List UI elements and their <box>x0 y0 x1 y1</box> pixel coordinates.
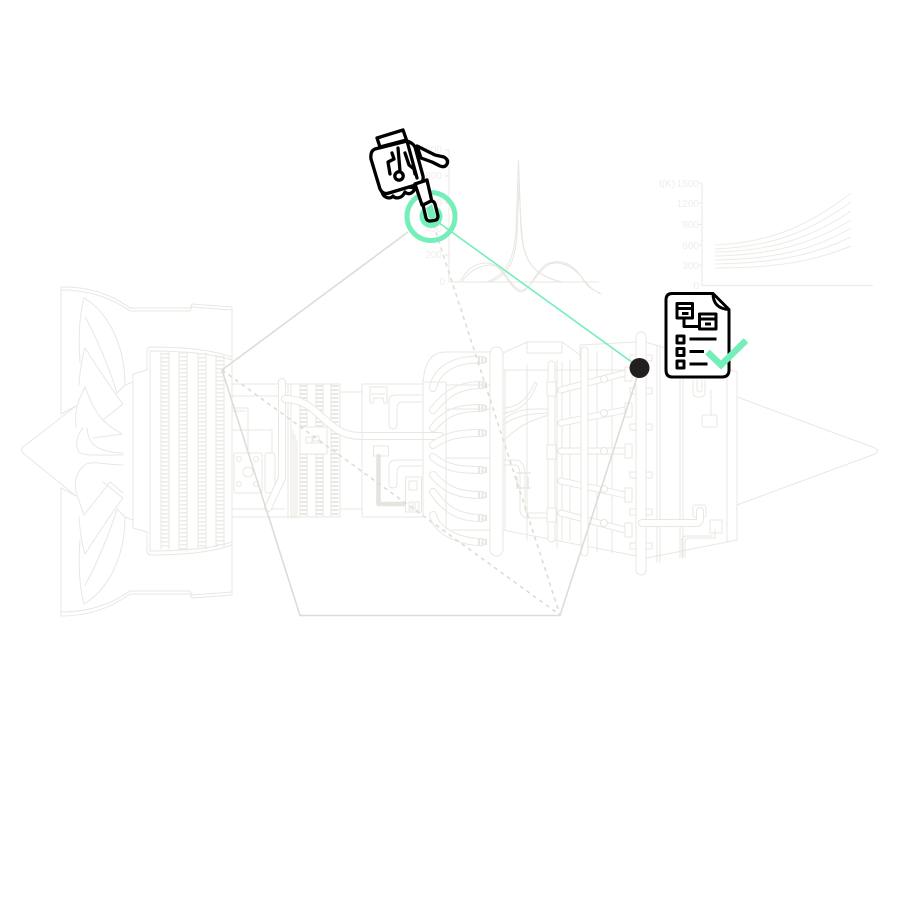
large vertical capsules <box>490 332 646 575</box>
check mark <box>708 340 746 365</box>
connector line <box>431 217 640 368</box>
compressor housing <box>125 347 232 555</box>
side pipes <box>503 382 553 518</box>
chart: temperature curves: t(K) <box>659 179 675 190</box>
chart: spectrum curves: 0 <box>439 277 445 288</box>
chart: temperature curves: 0 <box>693 281 699 292</box>
engine illustration <box>22 287 878 616</box>
chart: temperature curves: 1500 <box>677 179 699 190</box>
chart: temperature curves <box>659 179 873 292</box>
icon: document checklist <box>666 294 746 377</box>
chart: spectrum curves: 1000 <box>420 145 442 156</box>
curved pipes <box>423 352 490 542</box>
manifold arms <box>561 367 632 537</box>
tail cone <box>737 397 878 505</box>
rear body <box>503 342 737 562</box>
pipe and capsule <box>268 382 440 508</box>
sensor wire <box>374 446 422 512</box>
rear fittings <box>642 380 722 557</box>
chart: temperature curves: 900 <box>682 220 699 231</box>
chart: temperature curves: 1200 <box>677 199 699 210</box>
dashed diagonals <box>222 217 560 615</box>
casing notches <box>630 355 652 549</box>
chart: spectrum curves: 600 <box>425 198 442 209</box>
chart: spectrum curves <box>420 145 601 294</box>
pentagon outline <box>222 217 640 616</box>
center casing <box>340 384 423 517</box>
chart: spectrum curves: 200 <box>425 250 442 261</box>
chart: spectrum curves: 800 <box>425 171 442 182</box>
chart: spectrum curves: 400 <box>425 224 442 235</box>
target ring <box>407 192 455 240</box>
accessory box <box>232 384 340 517</box>
nacelle <box>61 287 232 616</box>
fan blades <box>75 298 125 604</box>
chart: temperature curves: 300 <box>682 261 699 272</box>
control box <box>300 427 327 454</box>
icon: robot hand <box>371 130 448 221</box>
black node <box>630 358 650 378</box>
stacked fins <box>288 385 335 518</box>
nose cone <box>22 406 76 496</box>
chart: temperature curves: 600 <box>682 241 699 252</box>
